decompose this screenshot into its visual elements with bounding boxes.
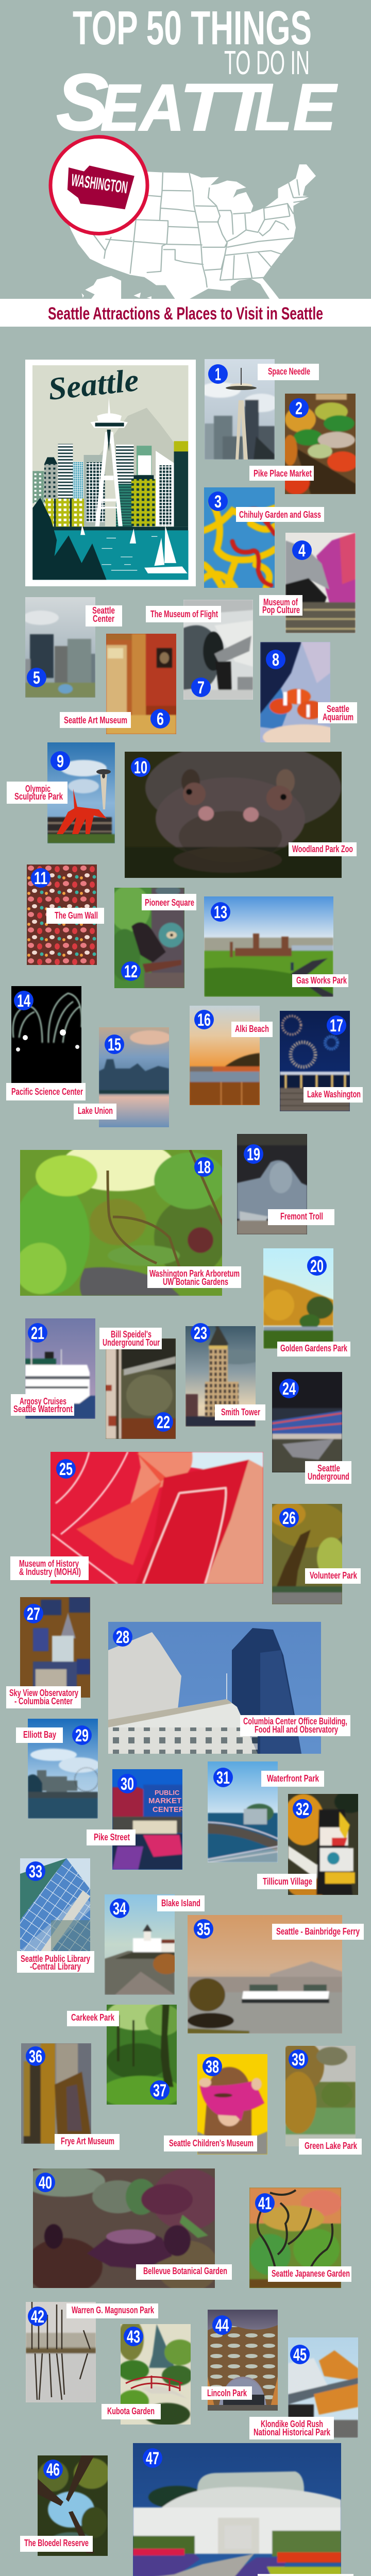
label: Washington Park Arboretum UW Botanic Gardens [147,1266,241,1288]
photo: Volunteer Park Conservatory [133,2443,341,2576]
photo: Lincoln Park [208,2310,278,2411]
label: Green Lake Park [299,2139,362,2155]
label: The Gum Wall: The Gum Wall [55,910,98,921]
attraction 29: Elliott Bay [16,1719,100,1819]
photo: Columbia Center [108,1622,321,1754]
photo: Pike Place Market [285,394,356,494]
photo: Frye Art Museum [21,2043,91,2144]
subtitle band [0,299,371,327]
photo: Underground Tour [106,1338,176,1439]
label: Bellevue Botanical Garden: Bellevue Botanical Garden [143,2266,227,2276]
attraction 25: Museum of History & Industry [10,1452,263,1584]
label: Olympic Sculpture Park [7,782,68,804]
attraction 14: Pacific Science Center [6,986,86,1100]
photo: Seattle Underground [272,1372,342,1472]
attraction 13: Gas Works Park [204,896,348,997]
badge 14: 14 [17,991,30,1011]
label: Bill Speidel's Underground Tour [99,1328,162,1349]
poster: Seattle skyline illustration: Seattle [46,363,140,407]
badge 37: 37 [153,2081,166,2100]
title: S [56,58,109,147]
attraction 27: Sky View Observatory [6,1597,90,1708]
attraction 3: Chihuly Garden and Glass [201,487,324,588]
label: Klondike Gold Rush [249,2417,334,2439]
photo: Alki Beach [190,1006,260,1105]
badge 7 [191,677,211,698]
label: Smith Tower: Smith Tower [221,1407,260,1417]
photo: Pike Street: PUBLIC [155,1789,180,1797]
label: Kubota Garden [102,2404,161,2419]
label: The Museum of Flight: The Museum of Flight [150,609,218,619]
label: Tillicum Village: Tillicum Village [263,1876,312,1887]
attraction 41: Seattle Japanese Garden [249,2188,351,2288]
label: Alki Beach [231,1022,273,1037]
attraction 18: Washington Park Arboretum [12,1140,241,1296]
attraction 32: Tillicum Village [257,1790,365,1898]
badge 30: 30 [121,1774,134,1794]
photo: Bellevue Botanical Garden [33,2168,215,2288]
photo: Seattle Public Library [20,1858,90,1951]
badge 24: 24 [282,1379,296,1399]
photo: Argosy Cruises [25,1318,95,1419]
attraction 9: Olympic Sculpture Park [7,742,115,843]
badge 1: 1 [215,365,221,384]
photo: Space Needle [205,359,275,460]
title: A [138,71,184,145]
label: Space Needle [258,364,319,380]
badge 26: 26 [282,1509,296,1528]
label: Tillicum Village [257,1874,316,1889]
title: TO DO IN [224,44,310,81]
badge 9: 9 [57,752,64,771]
label: Fremont Troll [268,1209,334,1225]
photo: Seattle Children's Museum [197,2054,267,2155]
label: Seattle Aquarium: Aquarium [323,712,353,722]
attraction 19: Fremont Troll [237,1134,334,1234]
attraction 15: Lake Union [74,1027,171,1127]
badge 2 [289,398,309,418]
label: Lincoln Park: Lincoln Park [207,2388,247,2398]
label: Pioneer Square: Pioneer Square [145,897,194,908]
label: Olympic Sculpture Park: Olympic [25,784,50,794]
badge 18: 18 [197,1158,211,1177]
attraction 17: Lake Washington [280,1011,363,1111]
badge 35: 35 [197,1920,210,1939]
attraction 4: Museum of Pop Culture [259,533,356,633]
label: Argosy Cruises Seattle Waterfront: Argosy Cruises [20,1396,66,1406]
label: The Bloedel Reserve [20,2536,93,2552]
badge 46: 46 [46,2460,60,2480]
icon: Washington state circle: WASHINGTON [70,170,129,197]
attraction 44: Lincoln Park [201,2310,278,2411]
label: Volunteer Park [305,1568,361,1584]
label: Olympic Sculpture Park: Sculpture Park [14,791,63,802]
label: Seattle Aquarium: Seattle [327,704,349,714]
attraction 10: Woodland Park Zoo [125,741,357,878]
label: Seattle Art Museum [60,712,131,728]
badge 16: 16 [197,1010,211,1030]
label: Waterfront Park [261,1771,324,1787]
label: Museum of Pop Culture: Museum of [263,597,298,607]
attraction 35: Seattle - Bainbridge Ferry [188,1915,364,2033]
label: Sky View Observatory: - Columbia Center [14,1696,73,1706]
label: The Bloedel Reserve: The Bloedel Reserve [24,2538,89,2548]
photo: Carkeek Park [107,2005,177,2105]
label: Columbia Center Office Building: Food Hall and Observatory [255,1724,338,1735]
photo: Chihuly Garden [204,487,275,588]
label: Chihuly Garden and Glass: Chihuly Garden and Glass [239,510,321,520]
attraction 30: Pike Street [87,1769,184,1870]
attraction 36: Frye Art Museum [21,2043,120,2150]
label: Seattle Aquarium [318,702,357,723]
photo: Lake Union [99,1027,169,1127]
badge 25: 25 [59,1460,73,1479]
badge 43: 43 [127,2327,140,2347]
label: Bellevue Botanical Garden [136,2264,232,2280]
label: Bill Speidel's Underground Tour: Bill Speidel's [111,1329,151,1340]
badge 15: 15 [108,1035,121,1055]
label: Museum of History & Industry: & Industry (MOHAI) [19,1567,81,1577]
title: T [180,70,232,145]
badge 1 [208,364,228,384]
label: Pike Street: Pike Street [94,1832,130,1842]
badge 2: 2 [295,399,302,418]
attraction 28: Columbia Center [108,1622,350,1754]
badge 40: 40 [39,2173,52,2193]
badge 36: 36 [29,2047,42,2066]
badge 4: 4 [298,541,306,561]
label: Lake Union: Lake Union [78,1106,113,1116]
label: Pacific Science Center: Pacific Science Center [11,1087,83,1097]
photo: Bainbridge Ferry [188,1915,342,2033]
label: Columbia Center Office Building [240,1715,350,1736]
label: Pike Street [87,1829,136,1845]
photo: Gas Works Park [204,896,333,997]
attraction 16: Alki Beach [190,1006,273,1105]
attraction 39: Green Lake Park [278,2041,362,2155]
label: Bill Speidel's Underground Tour: Underground Tour [103,1337,160,1348]
photo: The Gum Wall [27,865,97,965]
label: Waterfront Park: Waterfront Park [267,1773,319,1784]
badge 9 [50,751,70,771]
attraction 23: Smith Tower [185,1323,265,1427]
photo: Tillicum Village [288,1794,358,1895]
label: Klondike Gold Rush: National Historical Park [254,2427,331,2437]
badge 17: 17 [330,1016,343,1036]
attraction 46: The Bloedel Reserve [20,2455,110,2556]
attraction 31: Waterfront Park [208,1761,324,1862]
attraction 38: Seattle Children's Museum [164,2054,267,2155]
label: Washington Park Arboretum UW Botanic Gardens: Washington Park Arboretum [149,1268,240,1279]
title [56,1,338,147]
badge 6: 6 [157,709,164,729]
label: Elliott Bay: Elliott Bay [23,1730,56,1740]
badge 4 [292,540,312,561]
photo: Elliott Bay [28,1719,98,1819]
attraction 45: Klondike Gold Rush [249,2337,358,2439]
badge 33: 33 [29,1862,42,1882]
badge 12: 12 [124,962,138,981]
attraction 22: Bill Speidel's Underground Tour [99,1328,176,1439]
label: Argosy Cruises Seattle Waterfront [11,1394,74,1416]
label: Seattle Underground: Seattle [317,1463,340,1473]
badge 19: 19 [247,1145,260,1164]
photo: Pioneer Square [114,888,184,988]
label: Gas Works Park: Gas Works Park [296,975,347,986]
photo: Pike Street [112,1769,184,1870]
badge 11: 11 [34,869,47,888]
title: L [255,71,292,144]
badge 6 [150,709,170,729]
attraction 43: Kubota Garden [102,2319,195,2426]
attraction 26: Volunteer Park [269,1501,361,1604]
label: The Museum of Flight [146,606,221,622]
badge 21: 21 [31,1324,44,1343]
attraction 7: The Museum of Flight [146,600,253,700]
badge 3: 3 [214,492,222,512]
label: Elliott Bay [16,1727,63,1743]
badge 32: 32 [296,1800,309,1819]
badge 22: 22 [157,1413,170,1432]
label: Frye Art Museum [55,2134,120,2150]
label: Seattle Art Museum: Seattle Art Museum [64,715,127,725]
photo: Seattle Aquarium [260,642,330,742]
label: Pacific Science Center [6,1083,86,1100]
badge 41: 41 [258,2194,272,2213]
label: Space Needle: Space Needle [268,366,310,377]
photo: Lake Washington [280,1011,350,1111]
label: Museum of History & Industry [10,1556,89,1580]
photo: Pike Street: MARKET [148,1797,181,1805]
photo: MOHAI neon sign [50,1452,263,1584]
badge 34: 34 [113,1899,126,1919]
attraction 20: Golden Gardens Park [263,1248,350,1357]
label: Lincoln Park [201,2386,252,2400]
label: Gas Works Park [292,974,348,987]
badge 8: 8 [272,650,279,670]
badge 44: 44 [215,2316,229,2335]
attraction 37: Carkeek Park [67,1999,183,2109]
photo: Pike Street: CENTER [153,1805,184,1814]
badge 23: 23 [194,1324,207,1343]
label: Woodland Park Zoo [289,842,357,856]
label: Seattle Center: Center [93,614,114,624]
photo: Volunteer Park [272,1504,342,1604]
label: Seattle Public Library: -Central Library [30,1961,81,1972]
photo: Blake Island [105,1894,175,1995]
label: Seattle Center: Seattle [92,605,115,616]
label: Seattle - Bainbridge Ferry [272,1924,364,1940]
photo: Seattle Center [25,597,95,698]
label: Seattle Underground: Underground [308,1471,349,1482]
attraction 24: Seattle Underground [272,1372,351,1484]
icon: Washington state circle [50,137,147,234]
label: Washington Park Arboretum UW Botanic Gardens: UW Botanic Gardens [163,1277,228,1287]
attraction 11: The Gum Wall [27,865,104,965]
badge 13: 13 [214,903,227,922]
label: Carkeek Park: Carkeek Park [71,2012,115,2023]
badge 27: 27 [27,1604,40,1624]
label: Seattle Japanese Garden [268,2266,351,2282]
badge 8 [266,650,285,670]
attraction 40: Bellevue Botanical Garden [23,2166,232,2295]
attraction 5: Seattle Center [23,597,122,698]
attraction 6: Seattle Art Museum [60,634,176,734]
label: Sky View Observatory: Sky View Observatory [9,1688,78,1698]
photo: The Bloedel Reserve [38,2455,110,2556]
photo: Warren G. Magnuson Park [26,2302,96,2402]
photo: Smith Tower [185,1326,256,1427]
photo: Museum of Pop Culture [285,533,356,633]
poster: Seattle skyline illustration [25,360,196,586]
label: Museum of History & Industry: Museum of History [19,1558,79,1569]
photo: Museum of Flight [183,600,253,700]
label: Carkeek Park [67,2011,119,2026]
label: Warren G. Magnuson Park [66,2303,158,2318]
badge 42: 42 [31,2307,44,2327]
attraction 8: Seattle Aquarium [260,642,357,750]
badge 7: 7 [197,678,205,698]
label: Seattle Center [86,605,122,626]
label: Seattle Public Library [17,1951,94,1973]
photo: Kubota Garden [118,2319,195,2426]
attraction 47: Volunteer Park Conservatory [133,2443,353,2576]
title: E [100,71,141,145]
badge 39: 39 [292,2050,305,2070]
photo: Seattle Art Museum [106,634,176,734]
photo: Washington Park Arboretum [20,1150,222,1296]
photo: Klondike Gold Rush [288,2337,358,2438]
label: Warren G. Magnuson Park: Warren G. Magnuson Park [72,2305,155,2315]
badge 38: 38 [206,2057,219,2077]
label: Blake Island [157,1895,205,1911]
attraction 21: Argosy Cruises [11,1318,95,1419]
photo: Waterfront Park [208,1761,278,1862]
label: Fremont Troll: Fremont Troll [280,1211,323,1222]
photo: Fremont Troll [237,1134,307,1234]
label: Chihuly Garden and Glass [236,507,324,522]
label: Alki Beach: Alki Beach [235,1024,269,1034]
label: Pioneer Square [142,894,196,910]
map of the United States [55,164,316,299]
label: Seattle Underground [305,1461,351,1484]
title: E [293,71,338,144]
badge 20: 20 [310,1257,324,1276]
attraction 33: Seattle Public Library [17,1858,94,1973]
photo: Pacific Science Center [11,986,81,1083]
badge 29: 29 [75,1726,89,1745]
label: Pike Place Market [249,466,314,481]
label: Sky View Observatory [6,1686,81,1708]
attraction 12: Pioneer Square [109,885,196,988]
badge 5: 5 [33,668,40,688]
label: Klondike Gold Rush: Klondike Gold Rush [261,2419,323,2429]
badge 3 [208,492,228,512]
label: Smith Tower [215,1404,265,1420]
label: Lake Union [74,1104,116,1120]
attraction 34: Blake Island [105,1894,205,1995]
attraction 1: Space Needle [199,359,319,460]
label: Frye Art Museum: Frye Art Museum [61,2136,114,2146]
photo: Woodland Park Zoo [125,752,342,878]
attraction 42: Warren G. Magnuson Park [26,2302,158,2402]
badge 45: 45 [293,2345,307,2365]
title: T [222,70,273,145]
badge 31: 31 [216,1768,230,1788]
label: Golden Gardens Park [277,1342,350,1357]
photo: Seattle Japanese Garden [249,2188,342,2288]
label: Pike Place Market: Pike Place Market [254,468,312,479]
label: Seattle Children's Museum: Seattle Children's Museum [169,2138,254,2148]
label: Volunteer Park Conservatory [258,2574,353,2576]
label: Kubota Garden: Kubota Garden [107,2406,155,2416]
label: Blake Island: Blake Island [161,1898,200,1908]
label: Argosy Cruises Seattle Waterfront: Seattle Waterfront [13,1404,73,1414]
photo: Sky View Observatory [20,1597,90,1698]
label: The Gum Wall [46,908,104,924]
label: Seattle Public Library: Seattle Public Library [21,1954,90,1964]
photo: Golden Gardens Park [263,1248,333,1349]
label: Lake Washington [303,1087,363,1103]
attraction 2: Pike Place Market [249,394,358,495]
photo: Green Lake Park [285,2046,356,2146]
badge 5 [27,668,46,688]
badge 10: 10 [134,758,147,777]
badge 28: 28 [116,1628,129,1647]
photo: Olympic Sculpture Park [47,742,115,843]
badge 47: 47 [146,2449,159,2468]
label: Museum of Pop Culture: Pop Culture [262,605,300,615]
label: Museum of Pop Culture [259,595,302,616]
label: Seattle Children's Museum [164,2136,257,2151]
